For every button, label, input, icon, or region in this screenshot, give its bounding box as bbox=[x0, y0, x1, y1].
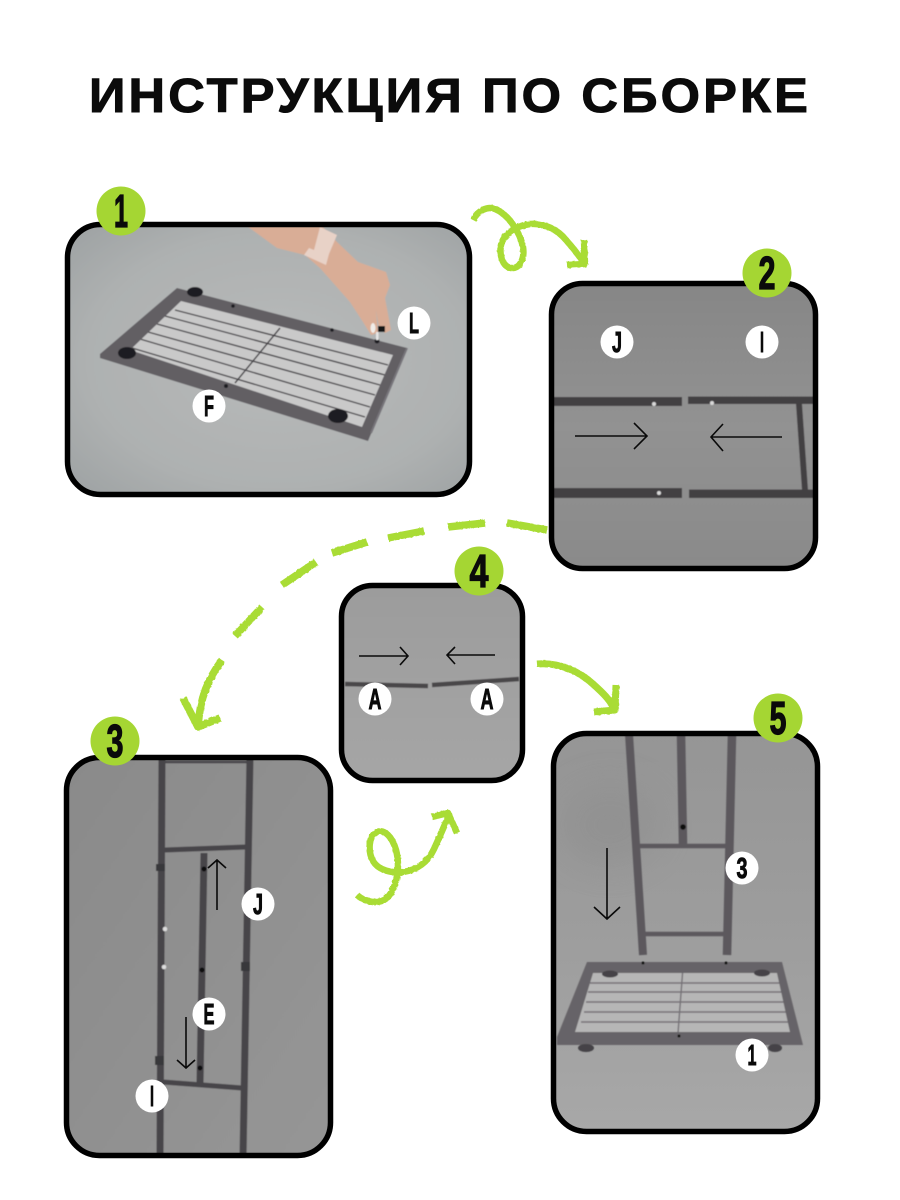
photo: tube connection bbox=[545, 280, 820, 572]
frame floor bbox=[130, 301, 393, 427]
step badge 4 bbox=[454, 545, 504, 597]
label I bbox=[136, 1080, 168, 1113]
label A left: A bbox=[368, 684, 382, 716]
arrow: step 4 to step 5 bbox=[537, 664, 616, 712]
feet bbox=[118, 287, 380, 423]
step badge 1: 1 bbox=[114, 185, 128, 237]
label L: L bbox=[409, 308, 419, 340]
label F bbox=[192, 390, 226, 423]
arrow: step 3 to step 4 bbox=[357, 813, 457, 902]
step badge 4: 4 bbox=[470, 545, 489, 597]
step badge 2 bbox=[742, 247, 792, 299]
step badge 2: 2 bbox=[758, 247, 776, 299]
label F: F bbox=[204, 391, 214, 423]
step badge 1 bbox=[96, 185, 146, 237]
panel: step 2 bbox=[545, 247, 820, 572]
photo: ladder lowered into base bbox=[550, 730, 822, 1135]
wires bbox=[132, 310, 388, 417]
watch bbox=[304, 227, 337, 265]
hand bbox=[247, 226, 391, 335]
panel: step 5 bbox=[550, 692, 822, 1135]
photo: short tubes bbox=[344, 588, 520, 778]
label A right bbox=[470, 682, 504, 716]
label 1: 1 bbox=[748, 1040, 756, 1072]
label A right: A bbox=[480, 684, 494, 716]
label I: I bbox=[150, 1081, 154, 1113]
step badge 5 bbox=[754, 692, 802, 744]
label J bbox=[242, 888, 274, 921]
base frame bbox=[575, 973, 790, 1032]
label I bbox=[746, 326, 778, 359]
label 3 bbox=[726, 852, 758, 885]
arrows bbox=[359, 647, 495, 665]
step badge 5: 5 bbox=[770, 692, 786, 744]
label A left bbox=[358, 682, 392, 716]
label J: J bbox=[253, 889, 263, 921]
label 1 bbox=[736, 1038, 768, 1072]
label L bbox=[398, 306, 430, 340]
photo: base frame and hand bbox=[70, 227, 467, 492]
photo: assembled ladder bbox=[62, 752, 334, 1158]
metal frame bbox=[100, 288, 407, 441]
step badge 3 bbox=[90, 715, 140, 767]
step badge 3: 3 bbox=[106, 715, 124, 767]
label E: E bbox=[204, 999, 214, 1031]
panel: step 4 bbox=[338, 545, 526, 784]
label J bbox=[600, 326, 634, 359]
panel: step 1 bbox=[60, 185, 480, 500]
label J: J bbox=[612, 327, 622, 359]
arrow bbox=[594, 848, 620, 919]
arrows bbox=[575, 423, 782, 451]
dashed arrow: step 2 to step 3 bbox=[183, 523, 547, 727]
label E bbox=[192, 998, 226, 1031]
label 3: 3 bbox=[736, 853, 748, 885]
panel: step 3 bbox=[62, 715, 334, 1158]
title: ИНСТРУКЦИЯ ПО СБОРКЕ bbox=[89, 70, 811, 123]
arrow: step 1 to step 2 bbox=[473, 208, 585, 268]
arrows bbox=[177, 860, 226, 1068]
label I: I bbox=[760, 327, 764, 359]
